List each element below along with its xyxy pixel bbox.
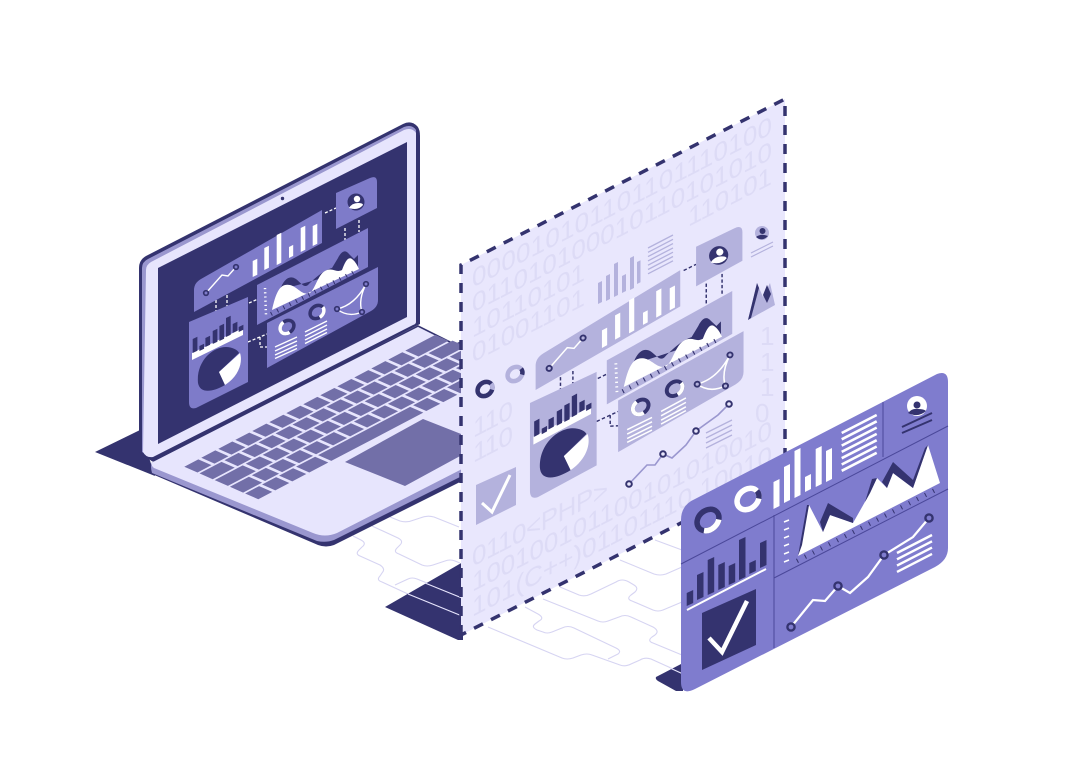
small bar chart [598, 256, 640, 304]
mountain area chart [797, 445, 941, 561]
panel: area chart [607, 291, 732, 404]
panel: donuts and text [618, 331, 744, 452]
binary code text: 1 [760, 321, 774, 351]
central dashboard copy [530, 227, 744, 498]
panel: profile [336, 177, 377, 229]
binary code text: 000010101101101110100 [472, 110, 772, 294]
checkbox [702, 589, 756, 670]
laptop [95, 122, 511, 547]
central panel shadow [385, 562, 463, 640]
dashed border [461, 99, 785, 635]
text lines [842, 415, 877, 471]
line chart [787, 514, 933, 631]
binary code text: 101(C++)01101110 10010 [472, 439, 772, 623]
panel dividers [681, 402, 948, 648]
connector dashes [560, 263, 722, 429]
small text lines [648, 235, 673, 274]
binary code text [472, 110, 774, 623]
right analytics panel [681, 373, 948, 691]
laptop screen dashboard [189, 177, 378, 408]
right panel shadow [656, 663, 683, 691]
binary code text: 0110<PHP> [472, 473, 608, 573]
binary code text: 110 [473, 394, 513, 444]
panel: line and bars [536, 270, 680, 390]
donut icons [693, 484, 763, 535]
panel: profile [696, 227, 742, 286]
mountain icon [748, 283, 775, 320]
trackpad [345, 419, 484, 486]
binary code text: 1 [760, 347, 774, 377]
binary code text: 01001101 [472, 281, 585, 369]
binary code text: 110101 [688, 160, 772, 233]
binary code text: 100100101100101010010 [472, 414, 772, 598]
small avatar [751, 226, 773, 257]
line chart on panel [626, 401, 732, 487]
binary code text: 110 [473, 419, 513, 469]
panel background [461, 99, 785, 635]
white bar chart [774, 446, 832, 509]
binary code text: 1 [760, 372, 774, 402]
central dashed code panel [461, 99, 785, 635]
binary code text: 0 [755, 398, 769, 428]
panel: donuts and text [267, 267, 378, 368]
panel: bars and pie [530, 372, 597, 498]
donut icons [475, 364, 525, 399]
connector dashes [216, 208, 359, 347]
panel: area chart [257, 228, 368, 325]
binary code text: 10110101 [472, 256, 585, 344]
ticks on chart axis [784, 520, 789, 562]
panel background [681, 373, 948, 691]
panel: line and bars [194, 210, 322, 312]
webcam dot [281, 197, 284, 200]
keyboard [184, 334, 511, 499]
profile icon [902, 396, 932, 433]
laptop shadow [95, 430, 155, 476]
binary code text: 011010100010110101010 [472, 135, 772, 319]
laptop lid [139, 122, 420, 462]
panel: bars and pie [189, 297, 248, 408]
laptop screen [158, 142, 407, 444]
checkbox icon [476, 467, 516, 525]
circuit traces on the floor [353, 516, 682, 673]
dark bar chart [687, 537, 766, 606]
laptop base [151, 326, 511, 546]
